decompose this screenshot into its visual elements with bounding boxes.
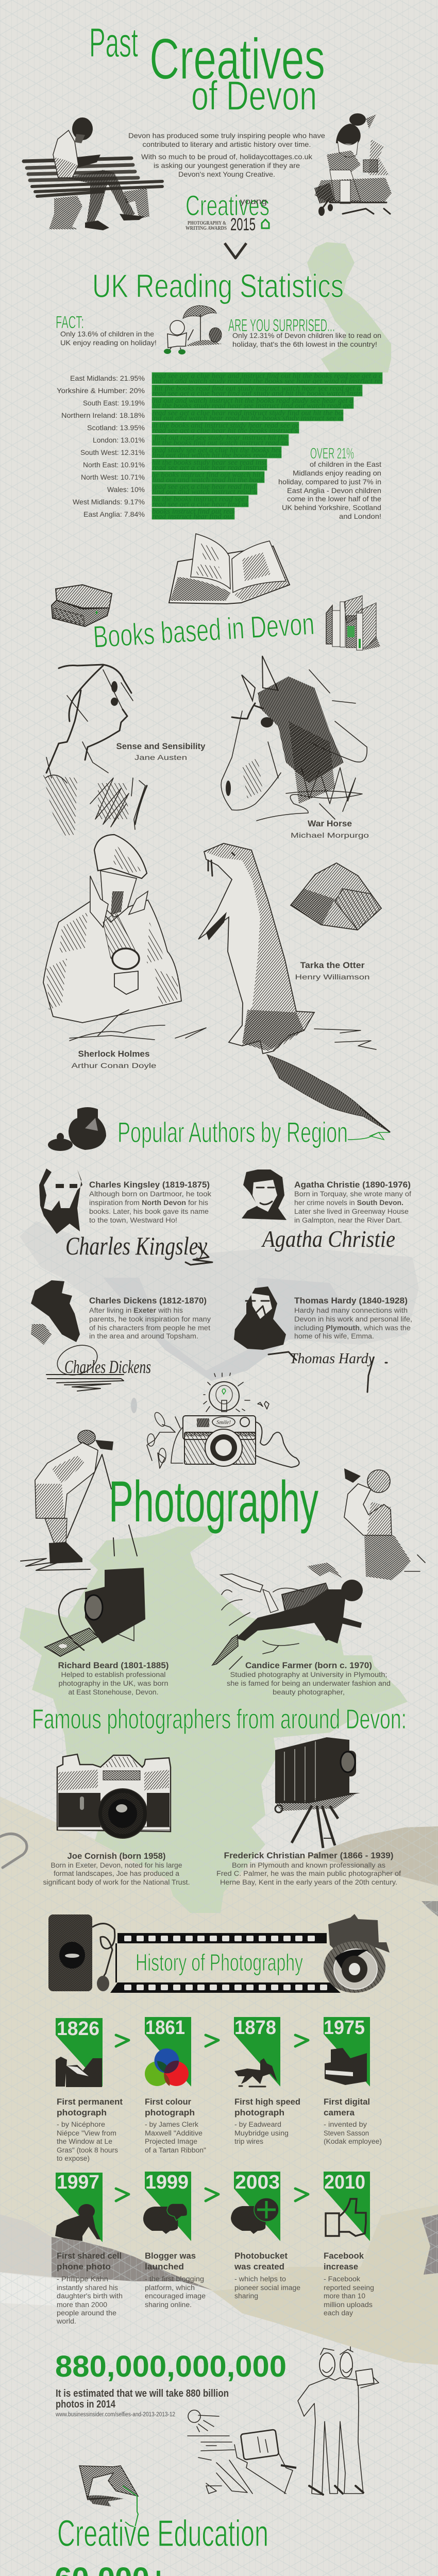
bar labels: East Anglia: 7.84%: [83, 510, 145, 518]
name and biography: Charles Dickens (1812-1870): [89, 1296, 207, 1306]
milestone: 1861: photograph: [145, 2108, 195, 2117]
milestone: 1999: Blogger was: [145, 2251, 196, 2261]
milestone: 1997: [55, 2172, 129, 2325]
name and biography: Thomas Hardy (1840-1928): [294, 1296, 408, 1306]
milestone: 1975: 1975: [324, 2017, 365, 2039]
milestone: 1997: people around the: [57, 2309, 116, 2317]
signature: [268, 1351, 387, 1392]
title: [89, 20, 325, 118]
milestone: 1861: Projected Image: [145, 2138, 197, 2145]
name and biography: books. Later, his book gave its name: [89, 1208, 209, 1215]
milestone: 1975: (Kodak employee): [324, 2138, 382, 2145]
milestone: 1878: 1878: [234, 2017, 276, 2039]
milestone: 1997: phone photo: [57, 2262, 111, 2272]
name and biography: her crime novels in South Devon.: [294, 1199, 403, 1207]
arrow: chevron down: [225, 243, 246, 258]
caption: Joe Cornish: [43, 1851, 190, 1886]
caption: Candice Farmer: Candice Farmer (born c. 1970): [245, 1660, 372, 1670]
milestone: 1826: the Window at Le: [57, 2138, 112, 2145]
illustration: folding camera: [45, 1568, 145, 1656]
caption: Sense and Sensibility: [116, 741, 206, 761]
milestone: 1878: [234, 2017, 308, 2145]
milestone: 1975: Steven Sasson: [324, 2129, 369, 2137]
caption: Sherlock Holmes: [71, 1049, 157, 1070]
logo: young creatives 2015: WRITING AWARDS: [186, 226, 227, 231]
caption: Frederick Christian Palmer: Frederick Christian Palmer (1866 - 1939): [224, 1851, 394, 1860]
handwritten bar texture: read see get a clue hear find out study and hit the books watch instruct read see: [152, 389, 398, 398]
name and biography: home of his wife, Emma.: [294, 1332, 374, 1340]
caption: Sherlock Holmes: Arthur Conan Doyle: [71, 1061, 157, 1070]
callout: are you surprised: [228, 316, 381, 348]
illustration: two friends taking a selfie: [298, 2347, 379, 2495]
handwritten bar texture: read see get a clue hear and instruct find out hit the books read see get a clue hear instruct: [152, 372, 434, 380]
milestone: 1826: First permanent: [57, 2097, 123, 2107]
name and biography: [89, 1296, 211, 1340]
illustration: stack of books: [52, 585, 112, 626]
signature: Charles Kingsley: [65, 1231, 208, 1260]
bar labels: West Midlands: 9.17%: [73, 498, 145, 506]
name and biography: Devon in his work and personal life,: [294, 1315, 412, 1323]
name and biography: [294, 1296, 412, 1340]
milestone: 2003: Photobucket: [234, 2251, 288, 2261]
caption: War Horse: Michael Morpurgo: [291, 831, 369, 839]
caption: Joe Cornish: Joe Cornish (born 1958): [67, 1851, 166, 1861]
milestone: 2003: - which helps to: [234, 2275, 286, 2283]
milestone: 1826: - by Nicéphore: [57, 2121, 105, 2128]
caption: Candice Farmer: [227, 1660, 391, 1696]
milestone: 1997: more than 2000: [57, 2301, 107, 2309]
milestone: 1861: First colour: [145, 2097, 191, 2107]
flash device: [48, 1914, 115, 1991]
bar labels: London: 13.01%: [93, 436, 145, 444]
illustration: ink bottle: [48, 1107, 106, 1151]
handwritten bar texture: the books instruct find out watch hit the books read study see hear: [149, 471, 354, 479]
illustration: Sherlock Holmes sketch: [43, 835, 181, 1041]
milestone: 1997: instantly shared his: [57, 2284, 118, 2292]
bar labels: Wales: 10%: [107, 485, 145, 494]
signature: Agatha Christie: [261, 1226, 395, 1252]
milestone: 1826: Gras" (took 8 hours: [57, 2146, 118, 2154]
statistic: 880 billion photos: [55, 2350, 287, 2418]
shutter: [324, 1914, 390, 1993]
intro text: With so much to be proud of, holidaycottages.co.uk: [141, 152, 313, 161]
milestone: 2010: million uploads: [324, 2301, 373, 2309]
fact: national: FACT:: [56, 313, 84, 332]
caption: Richard Beard: Helped to establish professional: [61, 1671, 166, 1679]
handwritten bar texture: hit the books instruct read see hear get a clue find out: [152, 495, 319, 503]
heading: creative education: Creative Education: [57, 2513, 268, 2554]
milestone: 1826: [56, 2018, 129, 2162]
caption: Joe Cornish: format landscapes, Joe has produced a: [54, 1870, 179, 1877]
caption: Richard Beard: photography in the UK, was born: [59, 1680, 168, 1687]
caption: Frederick Christian Palmer: Fred C. Palmer, he was the main public photographer of: [216, 1870, 401, 1877]
illustration: girl on suitcase: [314, 113, 392, 216]
illustration: otter: [175, 843, 376, 1054]
milestone: 2010: Facebook: [324, 2251, 364, 2261]
illustration: doodle camera with light bulb: Smile!: [216, 1419, 231, 1426]
handwritten bar texture: hit the books find out watch instruct read see hear study get a clue hear: [152, 439, 374, 447]
logo: young creatives 2015: [186, 189, 269, 234]
caption: Candice Farmer: she is famed for being an underwater fashion and: [227, 1680, 391, 1687]
milestone: 2010: - Facebook: [324, 2275, 360, 2283]
handwritten bar texture: read see get a clue hear read find out hit the books instruct: [152, 483, 335, 491]
handwritten bar texture: find out and watch read hit the books see hear study instruct: [152, 476, 339, 484]
caption: Richard Beard: Richard Beard (1801-1885): [58, 1660, 169, 1670]
handwritten bar texture: read see get a clue hear read instruct study find out hit the books watch see: [152, 409, 385, 417]
fact: national: UK enjoy reading on holiday!: [60, 338, 157, 347]
statistic: 880 billion photos: It is estimated that we will take 880 billion: [56, 2388, 229, 2399]
caption: Joe Cornish: significant body of work for the National Trust.: [43, 1878, 190, 1886]
statistic: 880 billion photos: 880,000,000,000: [55, 2350, 287, 2383]
milestone: 1861: [145, 2017, 218, 2154]
milestone: 1999: encouraged image: [145, 2292, 206, 2300]
name and biography: [89, 1180, 211, 1224]
milestone: 2010: more than 10: [324, 2292, 365, 2300]
timeline row one: [56, 2017, 382, 2162]
illustration: open book: [169, 534, 290, 604]
icon: paperclip: [0, 1834, 27, 1868]
milestone: 1826: 1826: [57, 2018, 99, 2040]
milestone: 1997: - Philippe Kahn: [57, 2275, 108, 2283]
name and biography: Charles Kingsley (1819-1875): [89, 1180, 210, 1190]
bar labels: South East: 19.19%: [83, 399, 145, 407]
milestone: 1878: trip wires: [234, 2138, 263, 2145]
signature: Charles Dickens: [64, 1357, 151, 1377]
milestone: 1878: Muybridge using: [234, 2129, 289, 2137]
handwritten bar texture: find out and watch study read hit the books see hear get wind of instruct read see get a clue: [149, 377, 432, 385]
name and biography: Agatha Christie (1890-1976): [294, 1180, 411, 1190]
signature: [46, 1340, 151, 1391]
caption: Sense and Sensibility: Sense and Sensibility: [116, 741, 206, 751]
callout: over 21%: UK behind Yorkshire, Scotland: [282, 503, 381, 512]
milestone: 1878: First high speed: [234, 2097, 300, 2107]
callout: over 21%: and London!: [339, 512, 381, 520]
logo: young creatives 2015: PHOTOGRAPHY &: [188, 221, 226, 226]
name and biography: in the area and around Topsham.: [89, 1332, 198, 1340]
milestone: 1999: - the first blogging: [145, 2275, 204, 2283]
bar labels: Northern Ireland: 18.18%: [61, 411, 145, 419]
fact: national: Only 13.6% of children in the: [60, 330, 154, 338]
intro text: Devon's next Young Creative.: [178, 170, 275, 178]
milestone: 1999: platform, which: [145, 2284, 195, 2292]
milestone: 1975: [324, 2017, 382, 2145]
portrait: [234, 1286, 286, 1350]
bar labels: Scotland: 13.95%: [87, 423, 145, 432]
callout: over 21%: East Anglia - Devon children: [287, 486, 381, 495]
caption: War Horse: War Horse: [308, 819, 352, 828]
milestone: 2010: 2010: [324, 2172, 365, 2193]
illustration: tablet photo at the beach: [188, 2410, 296, 2494]
milestone: 1975: First digital: [324, 2097, 370, 2107]
milestone: 2010: increase: [324, 2262, 358, 2272]
milestone: 1826: photograph: [57, 2108, 107, 2117]
handwritten bar texture: find out and watch instruct read see hit the books hear study: [152, 488, 339, 496]
caption: Tarka the Otter: [295, 960, 370, 981]
author: Charles Dickens: [31, 1280, 211, 1391]
logo: young creatives 2015: 2015: [230, 215, 256, 234]
handwritten bar texture: find out and watch hear read hit the books study instruct see get a clue: [149, 414, 368, 422]
name and biography: inspiration from North Devon for his: [89, 1199, 208, 1207]
milestone: 2003: 2003: [235, 2172, 280, 2193]
caption: War Horse: [291, 819, 369, 839]
logo: young creatives 2015: young: [240, 197, 267, 206]
caption: Richard Beard: [58, 1660, 169, 1696]
portrait: [31, 1280, 80, 1342]
intro text: is asking our youngest generation if they are: [154, 161, 300, 170]
callout: over 21%: of children in the East: [310, 460, 381, 468]
author: Charles Kingsley: [39, 1168, 212, 1265]
callout: are you surprised: holiday, that's the 6th lowest in the country!: [232, 340, 377, 348]
milestone: 1878: - by Eadweard: [234, 2121, 281, 2128]
milestone: 2003: was created: [234, 2262, 284, 2272]
portrait: [242, 1170, 287, 1220]
name and biography: After living in Exeter with his: [89, 1307, 183, 1314]
callout: over 21%: OVER 21%: [310, 445, 354, 462]
name and biography: Hardy had many connections with: [294, 1307, 408, 1314]
name and biography: to the town, Westward Ho!: [89, 1216, 177, 1224]
bar labels: [57, 374, 145, 518]
heading: history of photography: History of Photography: [136, 1949, 303, 1976]
timeline row two: [55, 2172, 374, 2325]
title: of Devon: [191, 73, 317, 118]
illustration: SLR camera: [57, 1754, 171, 1838]
milestone: 2003: pioneer social image: [234, 2284, 300, 2292]
callout: over 21%: [278, 445, 381, 520]
caption: Frederick Christian Palmer: [216, 1851, 401, 1886]
milestone: 1997: 1997: [57, 2172, 99, 2193]
caption: Candice Farmer: beauty photographer,: [273, 1688, 345, 1696]
milestone: 2003: [231, 2172, 308, 2300]
film strip: [110, 1933, 341, 1993]
illustration: standing books: [326, 596, 380, 650]
fact: national: [56, 313, 157, 347]
bar labels: North East: 10.91%: [83, 461, 145, 469]
handwritten bar texture: hit the books read find out study instruct watch hear see read get a clue hear instruct: [155, 384, 417, 393]
milestone: 1999: launched: [145, 2262, 184, 2272]
handwritten bar texture: read see get a clue hear hit the books instruct study watch read find out: [152, 427, 374, 435]
heading: photography: Photography: [109, 1469, 318, 1534]
milestone: 2003: sharing: [234, 2292, 258, 2300]
milestone: 1861: of a Tartan Ribbon": [145, 2146, 206, 2154]
milestone: 1975: camera: [324, 2108, 355, 2117]
handwritten bar texture: read see get a clue hear read instruct find out hit the books watch: [152, 464, 355, 472]
portrait: [39, 1168, 82, 1234]
bars: [152, 372, 382, 519]
illustration: graduation cap: [79, 2466, 138, 2527]
callout: over 21%: Midlands enjoy reading on: [293, 469, 381, 477]
caption: Sense and Sensibility: Jane Austen: [134, 753, 187, 761]
milestone: 1861: - by James Clerk: [145, 2121, 198, 2128]
milestone: 1878: photograph: [234, 2108, 284, 2117]
bar labels: Yorkshire & Humber: 20%: [57, 386, 145, 395]
name and biography: Later she lived in Greenway House: [294, 1208, 409, 1215]
milestone: 1826: Niépce "View from: [57, 2129, 116, 2137]
illustration: two closed books: [291, 863, 381, 930]
milestone: 2010: [324, 2172, 374, 2317]
milestone: 1997: First shared cell: [57, 2251, 122, 2261]
illustration: feather quill: [267, 1055, 390, 1132]
handwritten bar texture: find out and watch instruct hit the books read study see hear get a clue read see: [149, 397, 396, 405]
caption: Frederick Christian Palmer: Herne Bay, Kent in the early years of the 20th century.: [220, 1878, 397, 1886]
callout: over 21%: come in the lower half of the: [287, 495, 381, 503]
illustration: war horse: [221, 656, 367, 821]
bar labels: East Midlands: 21.95%: [70, 374, 145, 382]
illustration: photographer with tripod: [21, 1430, 137, 1570]
name and biography: including Plymouth , which was the: [294, 1324, 411, 1332]
handwritten bar texture: read see get a clue hear find out hit the books instruct: [152, 500, 319, 509]
intro text: Devon has produced some truly inspiring people who have: [128, 131, 325, 140]
milestone: 1999: [143, 2172, 218, 2309]
handwritten bar texture: read instruct hear find out hit the books see study: [152, 513, 305, 521]
milestone: 1999: 1999: [145, 2172, 189, 2193]
name and biography: of his characters from people he met: [89, 1324, 210, 1332]
handwritten bar texture: find out and watch hit the books read instruct see hear study get a clue: [152, 451, 371, 460]
icon: boy reading under beach umbrella: [164, 306, 222, 354]
illustration: photographer looking up: [344, 1468, 425, 1580]
title: Past: [89, 20, 138, 65]
illustration: diver: [212, 1563, 363, 1669]
logo: young creatives 2015: Creatives: [186, 189, 269, 222]
caption: Candice Farmer: Studied photography at University in Plymouth;: [230, 1671, 388, 1679]
handwritten bar texture: hit the books and instruct study hear read see get a clue find out watch: [149, 421, 368, 430]
name and biography: Born in Torquay, she wrote many of: [294, 1190, 411, 1198]
milestone: 1975: - invented by: [324, 2121, 367, 2128]
caption: Frederick Christian Palmer: Born in Plymouth and known professionally as: [232, 1861, 385, 1869]
caption: Joe Cornish: Born in Exeter, Devon, noted for his large: [50, 1861, 182, 1869]
callout: are you surprised: ARE YOU SURPRISED...: [228, 316, 335, 335]
handwritten bar texture: read study see get a clue hit the books hear watch instruct read find out: [152, 446, 374, 454]
handwritten bar texture: hit the books study hear see read instruct find out watch get a clue: [152, 459, 357, 467]
statistic: 880 billion photos: photos in 2014: [56, 2399, 116, 2410]
milestone: 1999: sharing online.: [145, 2301, 192, 2309]
heading: UK reading statistics: UK Reading Statistics: [92, 267, 344, 304]
statistic: 880 billion photos: www.businessinsider.com/selfies-and-2013-2013-12: [55, 2412, 175, 2418]
callout: are you surprised: Only 12.31% of Devon children like to read on: [232, 331, 381, 340]
milestone: 1861: Maxwell "Additive: [145, 2129, 203, 2137]
caption: Richard Beard: at East Stonehouse, Devon.: [68, 1688, 159, 1696]
handwritten bar texture: hit the books study read hear see instruct find out watch read get a clue hear: [152, 402, 389, 410]
heading: books based in Devon: Books based in Devon: [92, 606, 315, 654]
milestone: 2010: reported seeing: [324, 2284, 374, 2292]
illustration: Jane Austen sketch: [43, 665, 147, 836]
milestone: 1861: 1861: [145, 2017, 185, 2039]
handwritten bar texture: books instruct find out read see hit the books hear: [152, 507, 307, 516]
caption: Tarka the Otter: Henry Williamson: [295, 973, 370, 981]
milestone: 2010: each day: [324, 2309, 353, 2317]
illustration: bellows camera: [275, 1737, 360, 1848]
bar chart: reading by region: [57, 372, 382, 519]
author: Agatha Christie: [242, 1170, 411, 1252]
bar labels: South West: 12.31%: [80, 448, 145, 456]
caption: Sherlock Holmes: Sherlock Holmes: [78, 1049, 149, 1059]
milestone: 1826: to expose): [57, 2155, 90, 2162]
film strip banner: [48, 1914, 390, 1993]
illustration: doodle camera with light bulb: [147, 1373, 299, 1468]
intro text: [128, 131, 325, 178]
illustration: boy reading on bench: [24, 117, 162, 230]
title: Creatives: [149, 27, 325, 91]
milestone: 1997: daughter's birth with: [57, 2292, 123, 2300]
name and biography: in Galmpton, near the River Dart.: [294, 1216, 402, 1224]
caption: Tarka the Otter: Tarka the Otter: [300, 960, 365, 970]
name and biography: [294, 1180, 411, 1224]
name and biography: parents, he took inspiration for many: [89, 1315, 211, 1323]
handwritten bar texture: find out read see study hear instruct hit the books watch read get a clue: [155, 434, 376, 442]
author: Thomas Hardy: [234, 1286, 412, 1392]
handwritten bar texture: [152, 373, 382, 519]
signature: Thomas Hardy: [290, 1351, 375, 1367]
bar labels: North West: 10.71%: [81, 473, 145, 481]
milestone: 1997: world.: [56, 2317, 76, 2325]
name and biography: Although born on Dartmoor, he took: [89, 1190, 211, 1198]
intro text: contributed to literary and artistic history over time.: [142, 140, 311, 148]
callout: over 21%: holiday, compared to just 7% in: [278, 478, 381, 486]
